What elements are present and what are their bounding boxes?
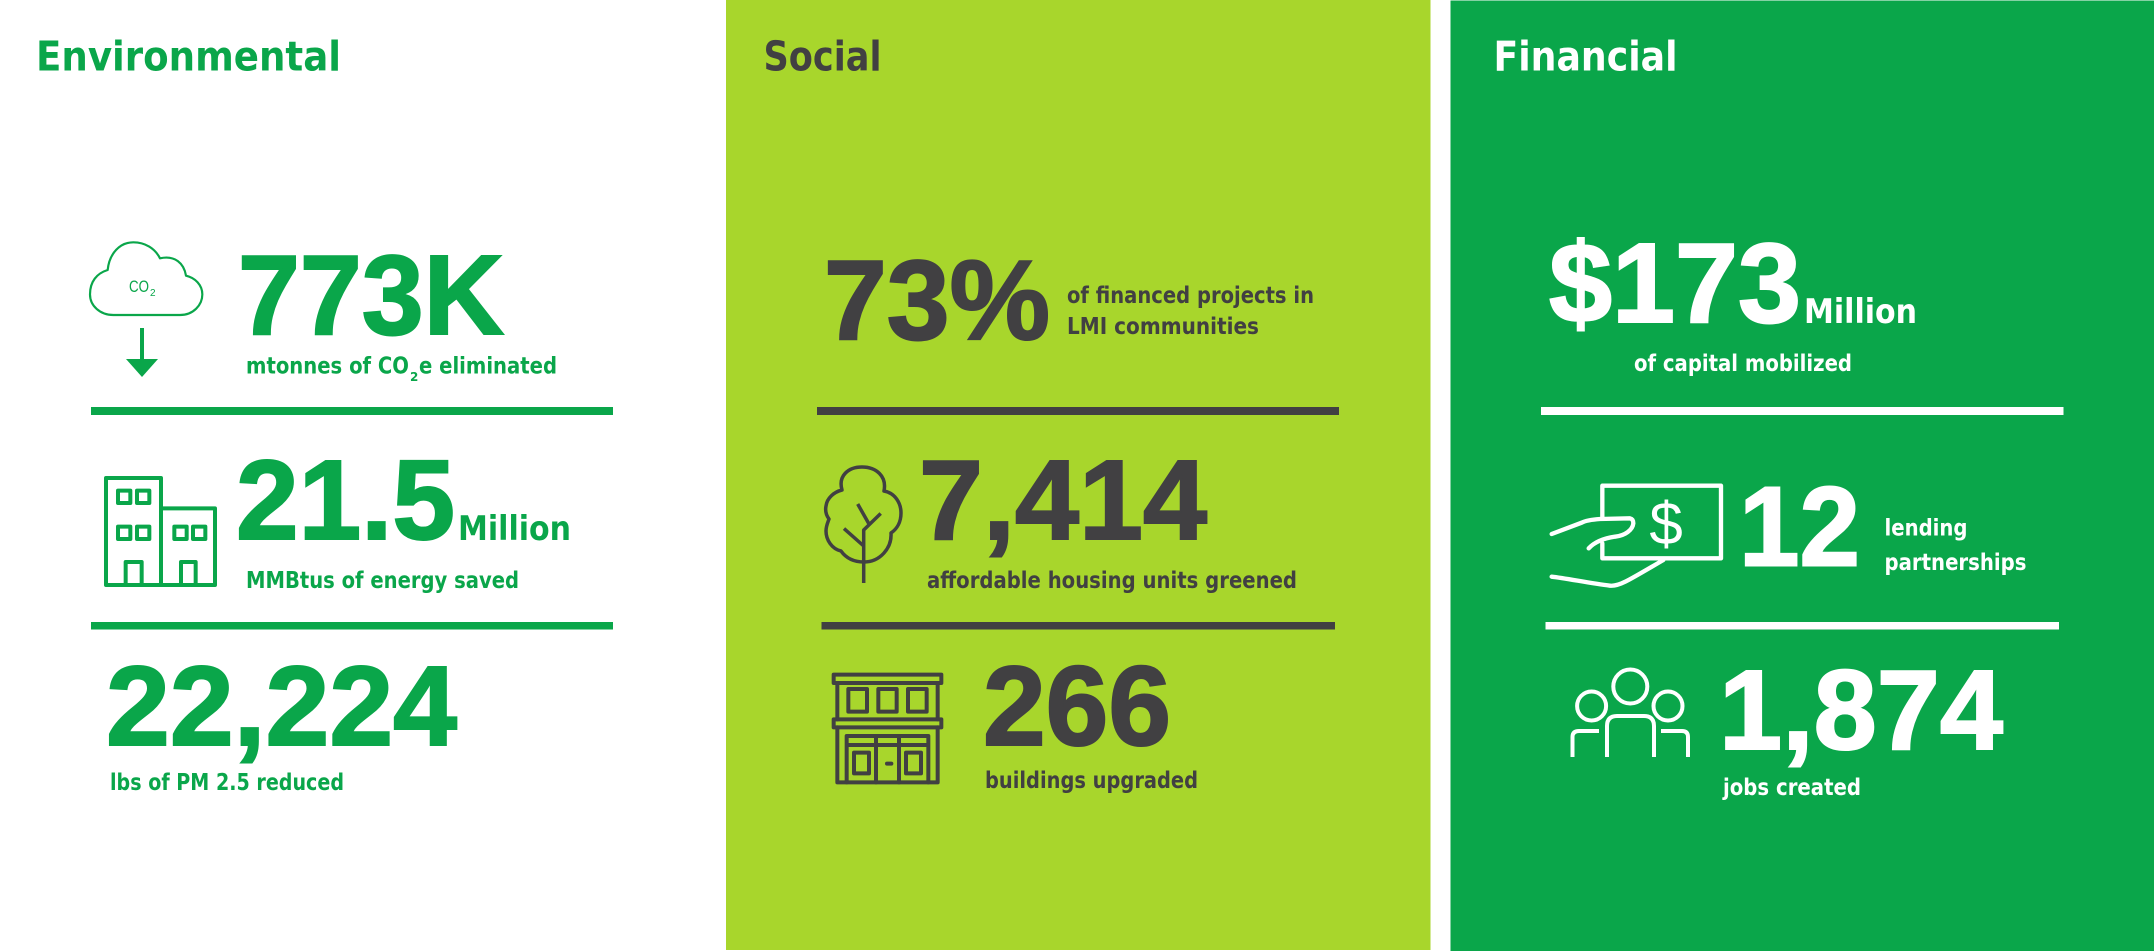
icon: office buildings xyxy=(106,478,215,585)
stat: $173 Million: Million xyxy=(1804,292,1917,332)
label: jobs created: jobs created xyxy=(1722,775,1861,801)
label: buildings upgraded: buildings upgraded xyxy=(985,768,1198,794)
icon: CO2 cloud with down arrow xyxy=(90,242,202,377)
icon: storefront building xyxy=(834,675,941,782)
stat: 21.5 Million xyxy=(236,437,571,563)
heading: Financial: Financial xyxy=(1494,32,1678,80)
label: MMBtus of energy saved: MMBtus of energy saved xyxy=(246,568,519,594)
icon: group of people xyxy=(1572,670,1688,757)
stat: $173 Million: $173 xyxy=(1549,220,1801,346)
stat: 21.5 Million: 21.5 xyxy=(236,437,455,563)
label: of financed projects in LMI communities: of financed projects in xyxy=(1067,283,1314,309)
label: of financed projects in LMI communities: LMI communities xyxy=(1067,314,1259,340)
stat: 7,414: 7,414 xyxy=(919,437,1207,563)
label: mtonnes of CO2e eliminated: e eliminated xyxy=(419,354,557,380)
label: lbs of PM 2.5 reduced: lbs of PM 2.5 reduced xyxy=(110,770,344,796)
label: lending partnerships: partnerships xyxy=(1884,550,2026,576)
heading: Environmental: Environmental xyxy=(36,32,341,80)
stat: 1,874: 1,874 xyxy=(1719,647,2003,773)
label: mtonnes of CO2e eliminated: mtonnes of CO xyxy=(246,354,409,380)
stat: 73%: 73% xyxy=(824,237,1050,363)
stat: 12: 12 xyxy=(1739,464,1860,590)
stat: 21.5 Million: Million xyxy=(458,509,571,549)
stat: 22,224: 22,224 xyxy=(106,643,457,769)
label: of financed projects in LMI communities xyxy=(1067,283,1314,340)
stat: $173 Million xyxy=(1549,220,1917,346)
panel: environmental xyxy=(36,32,613,796)
stat: 266: 266 xyxy=(983,643,1171,769)
icon: CO2 cloud with down arrow: CO xyxy=(129,277,149,296)
label: mtonnes of CO2e eliminated: 2 xyxy=(410,370,418,384)
icon: hand holding dollar bill: $ xyxy=(1649,490,1683,557)
panel: financial xyxy=(1450,0,2154,951)
icon: tree xyxy=(826,467,901,583)
label: of capital mobilized: of capital mobilized xyxy=(1634,351,1852,377)
label: affordable housing units greened: affordable housing units greened xyxy=(927,568,1297,594)
label: mtonnes of CO2e eliminated xyxy=(246,354,557,384)
label: lending partnerships xyxy=(1884,516,2026,576)
icon: hand holding dollar bill xyxy=(1552,486,1721,586)
heading: Social: Social xyxy=(764,32,882,80)
label: lending partnerships: lending xyxy=(1884,516,1968,542)
stat: 773K: 773K xyxy=(238,232,504,358)
panel: social xyxy=(726,0,1430,950)
icon: CO2 cloud with down arrow: 2 xyxy=(150,288,156,299)
